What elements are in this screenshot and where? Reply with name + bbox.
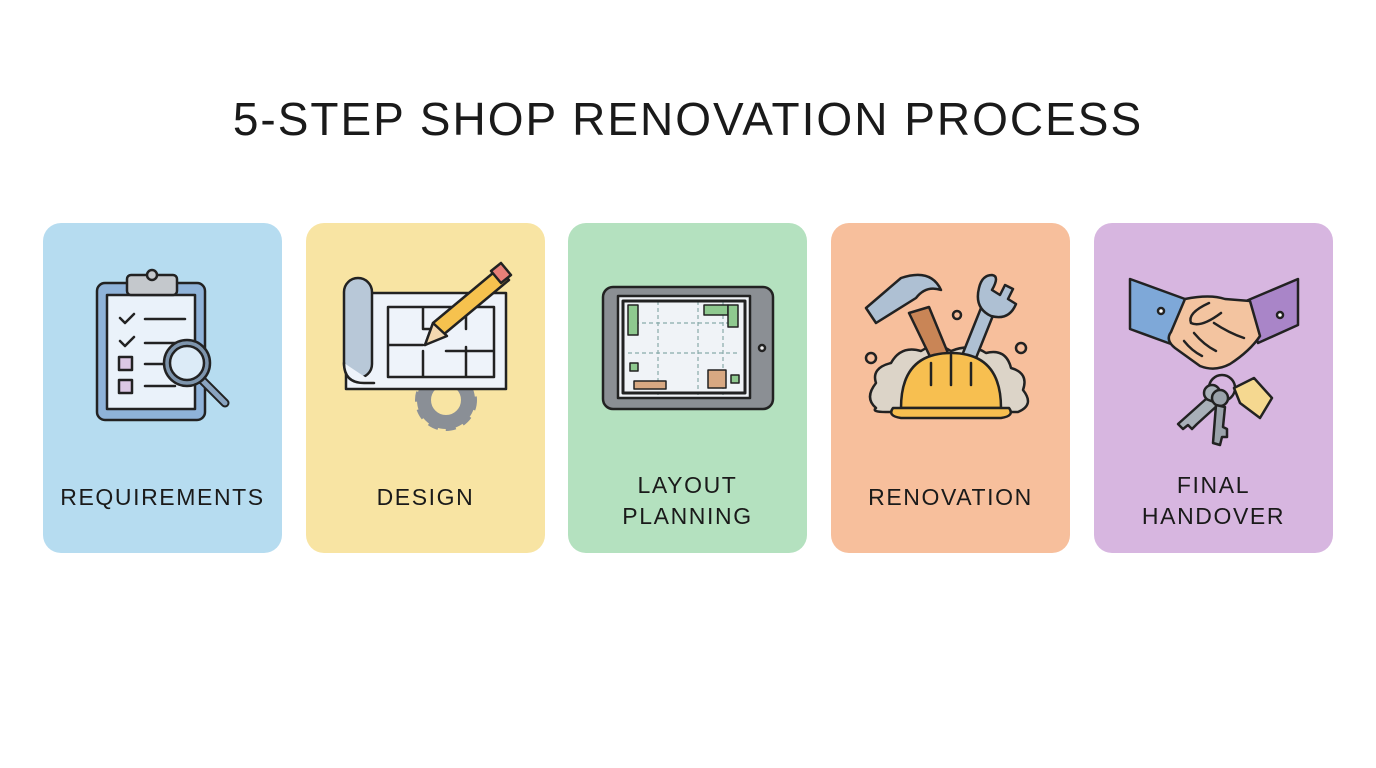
icon: hammer wrench helmet bbox=[864, 274, 1030, 420]
panel: layout planning: PLANNING bbox=[622, 503, 753, 529]
title: 5-STEP SHOP RENOVATION PROCESS bbox=[233, 93, 1143, 145]
icon: handshake and keys bbox=[1128, 278, 1300, 446]
icon: clipboard with magnifier bbox=[96, 268, 230, 422]
panel: renovation: RENOVATION bbox=[868, 484, 1033, 510]
icon: blueprint with pencil and gear bbox=[342, 262, 512, 431]
panel: final handover bbox=[1094, 223, 1333, 553]
panel: layout planning bbox=[568, 223, 807, 553]
panel: requirements bbox=[43, 223, 282, 553]
panel: final handover: FINAL bbox=[1177, 472, 1250, 498]
icon: tablet with floor plan bbox=[602, 286, 774, 410]
panel: layout planning: LAYOUT bbox=[638, 472, 737, 498]
panel: requirements: REQUIREMENTS bbox=[60, 484, 265, 510]
panel: renovation bbox=[831, 223, 1070, 553]
panel: design bbox=[306, 223, 545, 553]
panel: design: DESIGN bbox=[377, 484, 474, 510]
panel: final handover: HANDOVER bbox=[1142, 503, 1285, 529]
